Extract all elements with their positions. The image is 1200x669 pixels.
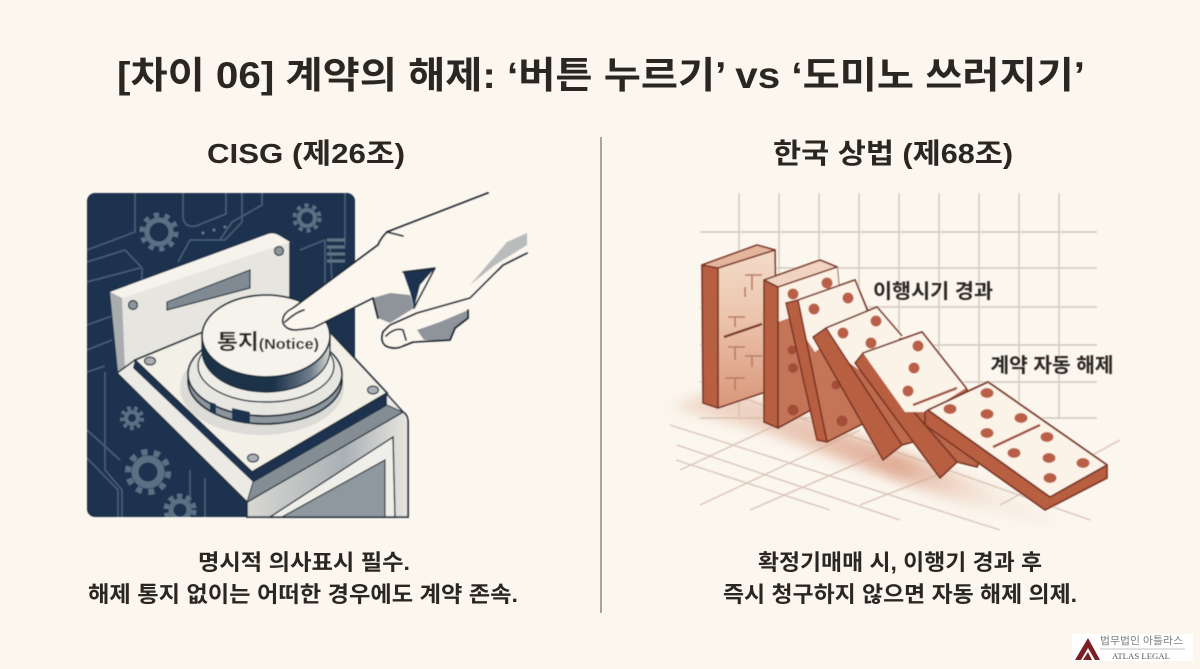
floor shadow (672, 385, 1060, 525)
right description (723, 550, 1077, 607)
right description: 즉시 청구하지 않으면 자동 해제 의제. (723, 582, 1077, 607)
right description: 확정기매매 시, 이행기 경과 후 (758, 550, 1042, 575)
logo: Atlas Legal: ATLAS LEGAL (1112, 651, 1170, 661)
domino 1: brick (702, 245, 777, 408)
label: 이행시기 경과: 이행시기 경과 (873, 280, 993, 303)
back plate (110, 233, 290, 372)
button (180, 295, 344, 435)
logo: Atlas Legal: 법무법인 아틀라스 (1100, 635, 1183, 647)
domino 4 (813, 307, 920, 460)
navy circuit panel (87, 193, 355, 524)
top plate (135, 332, 387, 472)
domino 3 (786, 280, 880, 442)
illustration: button press (87, 193, 527, 524)
heading: 한국 상법: 한국 상법 (제68조) (773, 138, 1013, 169)
domino 2 (764, 260, 840, 428)
heading: CISG: CISG (제26조) (207, 138, 405, 169)
illustration: falling dominoes (670, 193, 1120, 530)
left description: 명시적 의사표시 필수. (198, 550, 410, 575)
left description: 해제 통지 없이는 어떠한 경우에도 계약 존속. (88, 582, 518, 607)
button label: 통지(Notice) (217, 331, 319, 354)
logo: Atlas Legal (1072, 634, 1193, 661)
gears (122, 206, 320, 524)
label: 계약 자동 해제: 계약 자동 해제 (990, 354, 1114, 377)
center divider (600, 137, 602, 613)
machine body (117, 342, 408, 517)
title: [차이 06] 계약의 해제: ‘버튼 누르기’ vs ‘도미노 쓰러지기’ (117, 55, 1085, 96)
grid wall and floor (700, 193, 1097, 418)
domino 5 (855, 332, 990, 478)
domino 6 (925, 382, 1107, 510)
left description (88, 550, 518, 607)
hand (283, 193, 527, 348)
